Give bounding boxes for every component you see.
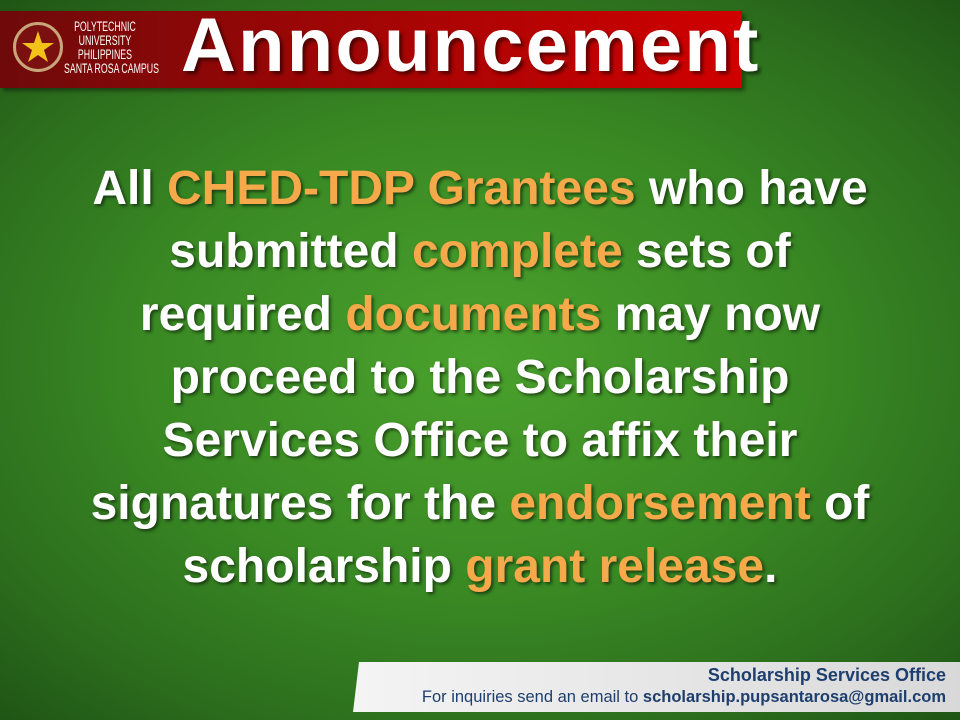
announcement text: proceed to the Scholarship bbox=[171, 351, 789, 404]
footer office name: Scholarship Services Office bbox=[708, 665, 946, 685]
announcement text bbox=[91, 162, 873, 596]
university name bbox=[64, 19, 159, 76]
announcement text: signatures for the endorsement of bbox=[91, 477, 869, 530]
title: Announcement bbox=[181, 3, 761, 88]
announcement text: submitted complete sets of bbox=[169, 225, 791, 278]
footer panel bbox=[353, 662, 960, 712]
footer contact: For inquiries send an email to scholarship.pupsantarosa@gmail.com bbox=[422, 688, 946, 706]
university name: SANTA ROSA CAMPUS bbox=[64, 61, 159, 76]
announcement text: scholarship grant release. bbox=[183, 540, 777, 593]
university name: UNIVERSITY bbox=[79, 33, 131, 48]
announcement text: Services Office to affix their bbox=[163, 414, 797, 467]
university name: POLYTECHNIC bbox=[74, 19, 136, 34]
icon: university seal bbox=[13, 22, 63, 72]
university name: PHILIPPINES bbox=[78, 47, 132, 62]
header banner bbox=[0, 11, 742, 88]
announcement text: required documents may now bbox=[140, 288, 820, 341]
announcement text: All CHED-TDP Grantees who have bbox=[92, 162, 868, 215]
